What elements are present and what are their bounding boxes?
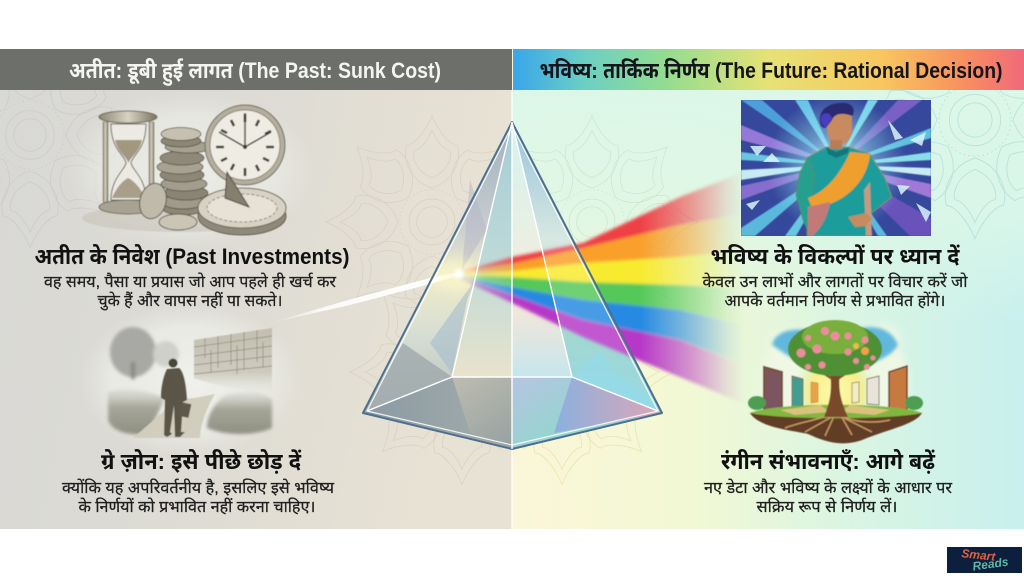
heading: focus on future options: भविष्य के विकल्पों पर ध्यान दें: [710, 244, 960, 269]
text: colourful possibilities: [704, 478, 952, 516]
text: past investments: वह समय, पैसा या प्रयास जो आप पहले ही खर्च कर: [44, 272, 336, 291]
grass: [108, 390, 165, 434]
heading: grey zone: ग्रे ज़ोन: इसे पीछे छोड़ दें: [101, 449, 302, 475]
heading: past investments: अतीत के निवेश (Past Investments): [34, 244, 350, 269]
bushes: [748, 396, 766, 410]
illustration: man in kurta with rays: [741, 100, 931, 236]
white light beam: [268, 272, 458, 324]
rainbow spectrum: [460, 176, 740, 400]
clock: [205, 105, 285, 185]
text: past investments: चुके हैं और वापस नहीं पा सकते।: [98, 291, 282, 311]
text: colourful possibilities: नए डेटा और भविष्य के लक्ष्यों के आधार पर: [704, 478, 952, 497]
tree: [110, 327, 179, 379]
panel: future background and header: [512, 49, 1024, 529]
logo: Smart Reads: Smart: [961, 546, 997, 564]
prism faces: [363, 122, 662, 449]
man: [161, 358, 191, 437]
trunk and canopy: [824, 370, 848, 417]
text: grey zone: क्योंकि यह अपरिवर्तनीय है, इसलिए इसे भविष्य: [62, 478, 335, 497]
text: past investments: [44, 272, 336, 311]
panel header: past: अतीत: डूबी हुई लागत (The Past: Sunk Cost): [69, 58, 441, 86]
text: focus on future options: [702, 272, 968, 310]
text: focus on future options: आपके वर्तमान निर्णय से प्रभावित होंगे।: [724, 291, 946, 310]
panel: future content: [702, 100, 968, 516]
text: focus on future options: केवल उन लाभों और लागतों पर विचार करें जो: [702, 272, 968, 291]
logo: Smart Reads: [947, 546, 1022, 573]
prism edges: [363, 122, 662, 449]
hourglass: [99, 111, 157, 214]
panel header: past: [0, 49, 512, 90]
man figure: [796, 103, 892, 236]
prism with light beam and rainbow: [268, 90, 770, 529]
text: grey zone: [62, 478, 335, 516]
text: colourful possibilities: सक्रिय रूप से निर्णय लें।: [756, 497, 898, 516]
panel: the past: [0, 49, 512, 529]
doors: [764, 366, 907, 412]
sundial: [198, 172, 286, 235]
heading: colourful possibilities: रंगीन संभावनाएँ: आगे बढ़ें: [721, 449, 936, 475]
logo: Smart Reads: Reads: [972, 555, 1010, 573]
icon: man in fog before wall: [78, 304, 302, 456]
coins stack: [157, 128, 211, 215]
wall: [194, 328, 272, 392]
icon: hourglass, coins, clock and sundial: [65, 92, 315, 248]
panel header: future: [513, 49, 1024, 90]
illustration: tree with doors: [748, 320, 923, 443]
text: grey zone: के निर्णयों को प्रभावित नहीं करना चाहिए।: [78, 497, 316, 516]
ground: [750, 406, 922, 443]
